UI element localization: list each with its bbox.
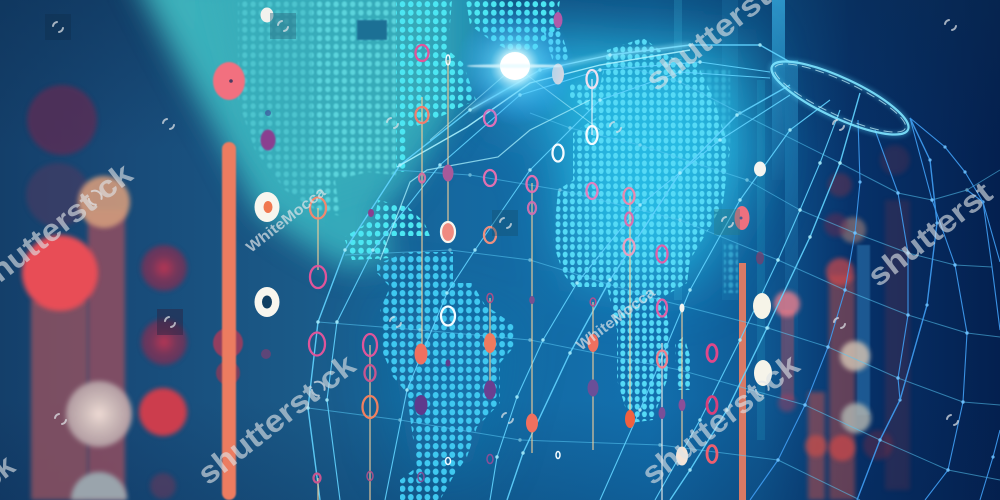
globe latitudes (308, 62, 1000, 500)
polar ring (764, 48, 916, 148)
data stems (318, 60, 682, 500)
dotted map: africa (553, 38, 730, 423)
teal wedge inner core (215, 0, 440, 200)
dotted map: south america (377, 252, 514, 500)
dotted map: north america mid band (312, 0, 396, 216)
watermark: shutterstock centre: shutterst ck (191, 346, 363, 492)
dotted map: north america sharp part (343, 0, 476, 260)
vertical light bars (674, 0, 870, 440)
watermark: shutterstock lower right: shutterst ck (635, 346, 807, 492)
pink and orange rings (309, 45, 717, 482)
blurred blue glow behind map (385, 30, 750, 470)
bright arc glow near flare (380, 45, 690, 260)
white donut markers (254, 192, 280, 317)
map hole: upper (357, 20, 387, 40)
bar: second (88, 210, 125, 500)
dotted map: north america far soft band (238, 0, 312, 208)
dotted map: greenland area (466, 0, 560, 55)
dotted map: middle east stripes (700, 70, 730, 145)
right bars and bokeh (739, 145, 910, 500)
globe meridians left (308, 45, 860, 500)
globe meridians right (750, 118, 1000, 500)
watermark: shutterstock far right: shutterst (861, 175, 999, 294)
glowing flare (455, 6, 575, 126)
watermark: WhiteMocca centre: WhiteMocca (573, 284, 659, 354)
bar: wide left (31, 300, 88, 500)
wireframe globe (308, 45, 1000, 500)
watermark corner icons (45, 13, 958, 425)
dotted map: madagascar (675, 336, 690, 390)
dotted map: india bar (724, 243, 738, 293)
filled markers (213, 8, 772, 466)
bar: thin orange (222, 142, 236, 500)
dotted map: small island top (543, 28, 570, 62)
watermark: WhiteMocca left: WhiteMocca (243, 183, 330, 256)
teal wedge behind north america (130, 0, 490, 268)
left bars and bokeh (22, 85, 271, 500)
white rings (441, 55, 598, 464)
